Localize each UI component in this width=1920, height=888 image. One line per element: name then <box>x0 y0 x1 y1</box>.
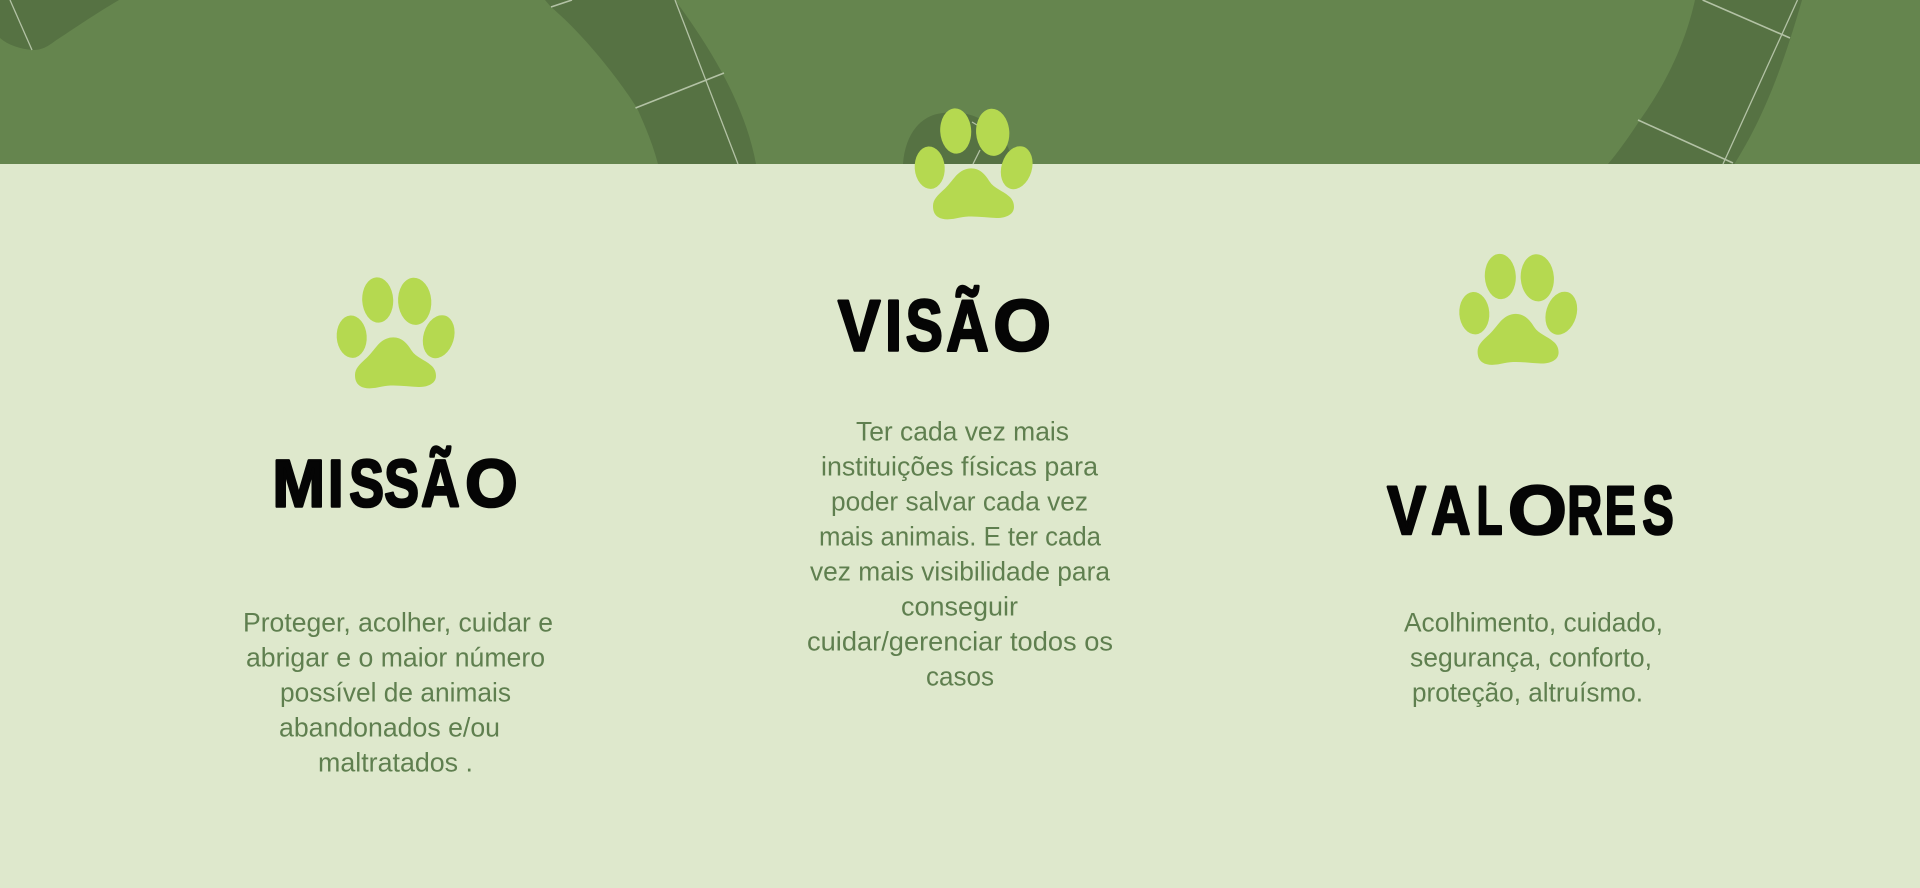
heading: valores: S <box>1642 472 1674 549</box>
heading: visão: I <box>885 286 902 366</box>
heading: valores: V <box>1387 472 1426 549</box>
text block: visão: cuidar/gerenciar todos os <box>807 627 1113 657</box>
icon: paw (valores) <box>1458 253 1582 365</box>
heading: missão: I <box>328 446 343 522</box>
heading: visão: V <box>838 286 880 366</box>
heading: visão: S <box>906 286 943 366</box>
text block: visão: instituições físicas para <box>821 452 1098 482</box>
heading: valores: E <box>1605 472 1636 549</box>
text block: missão <box>243 608 553 778</box>
heading: missão: S <box>349 446 384 522</box>
text block: visão: conseguir <box>901 592 1018 622</box>
text block: valores <box>1404 608 1663 708</box>
text block: visão: poder salvar cada vez <box>831 487 1088 517</box>
text block: missão: maltratados . <box>318 748 473 778</box>
heading: valores: A <box>1431 472 1470 549</box>
text block: valores: segurança, conforto, <box>1410 643 1652 673</box>
icon: paw (missão) <box>335 277 460 388</box>
text block: missão: abrigar e o maior número <box>246 643 545 673</box>
icon: paw (visão) <box>913 108 1038 219</box>
text block: missão: possível de animais <box>280 678 511 708</box>
heading: valores: R <box>1567 472 1602 549</box>
heading: missão: S <box>384 446 419 522</box>
text block: valores: proteção, altruísmo. <box>1412 678 1643 708</box>
text block: visão: mais animais. E ter cada <box>819 522 1101 552</box>
heading: missão: Ã <box>421 446 460 522</box>
heading: missão: O <box>465 446 518 522</box>
heading: valores: O <box>1508 472 1567 549</box>
text block: visão: vez mais visibilidade para <box>810 557 1110 587</box>
header band with paw print silhouettes <box>0 0 1920 164</box>
text block: visão: Ter cada vez mais <box>856 417 1069 447</box>
text block: missão: abandonados e/ou <box>279 713 500 743</box>
heading: visão: Ã <box>946 286 989 366</box>
heading: valores: L <box>1477 472 1502 549</box>
heading: missão: M <box>272 446 325 522</box>
panel: valores <box>1387 253 1674 708</box>
text block: visão <box>807 417 1113 692</box>
panel: missão <box>243 277 553 778</box>
text block: missão: Proteger, acolher, cuidar e <box>243 608 553 638</box>
panel: visão <box>807 286 1113 692</box>
text block: visão: casos <box>926 662 994 692</box>
heading: visão: O <box>993 286 1051 366</box>
text block: valores: Acolhimento, cuidado, <box>1404 608 1663 638</box>
